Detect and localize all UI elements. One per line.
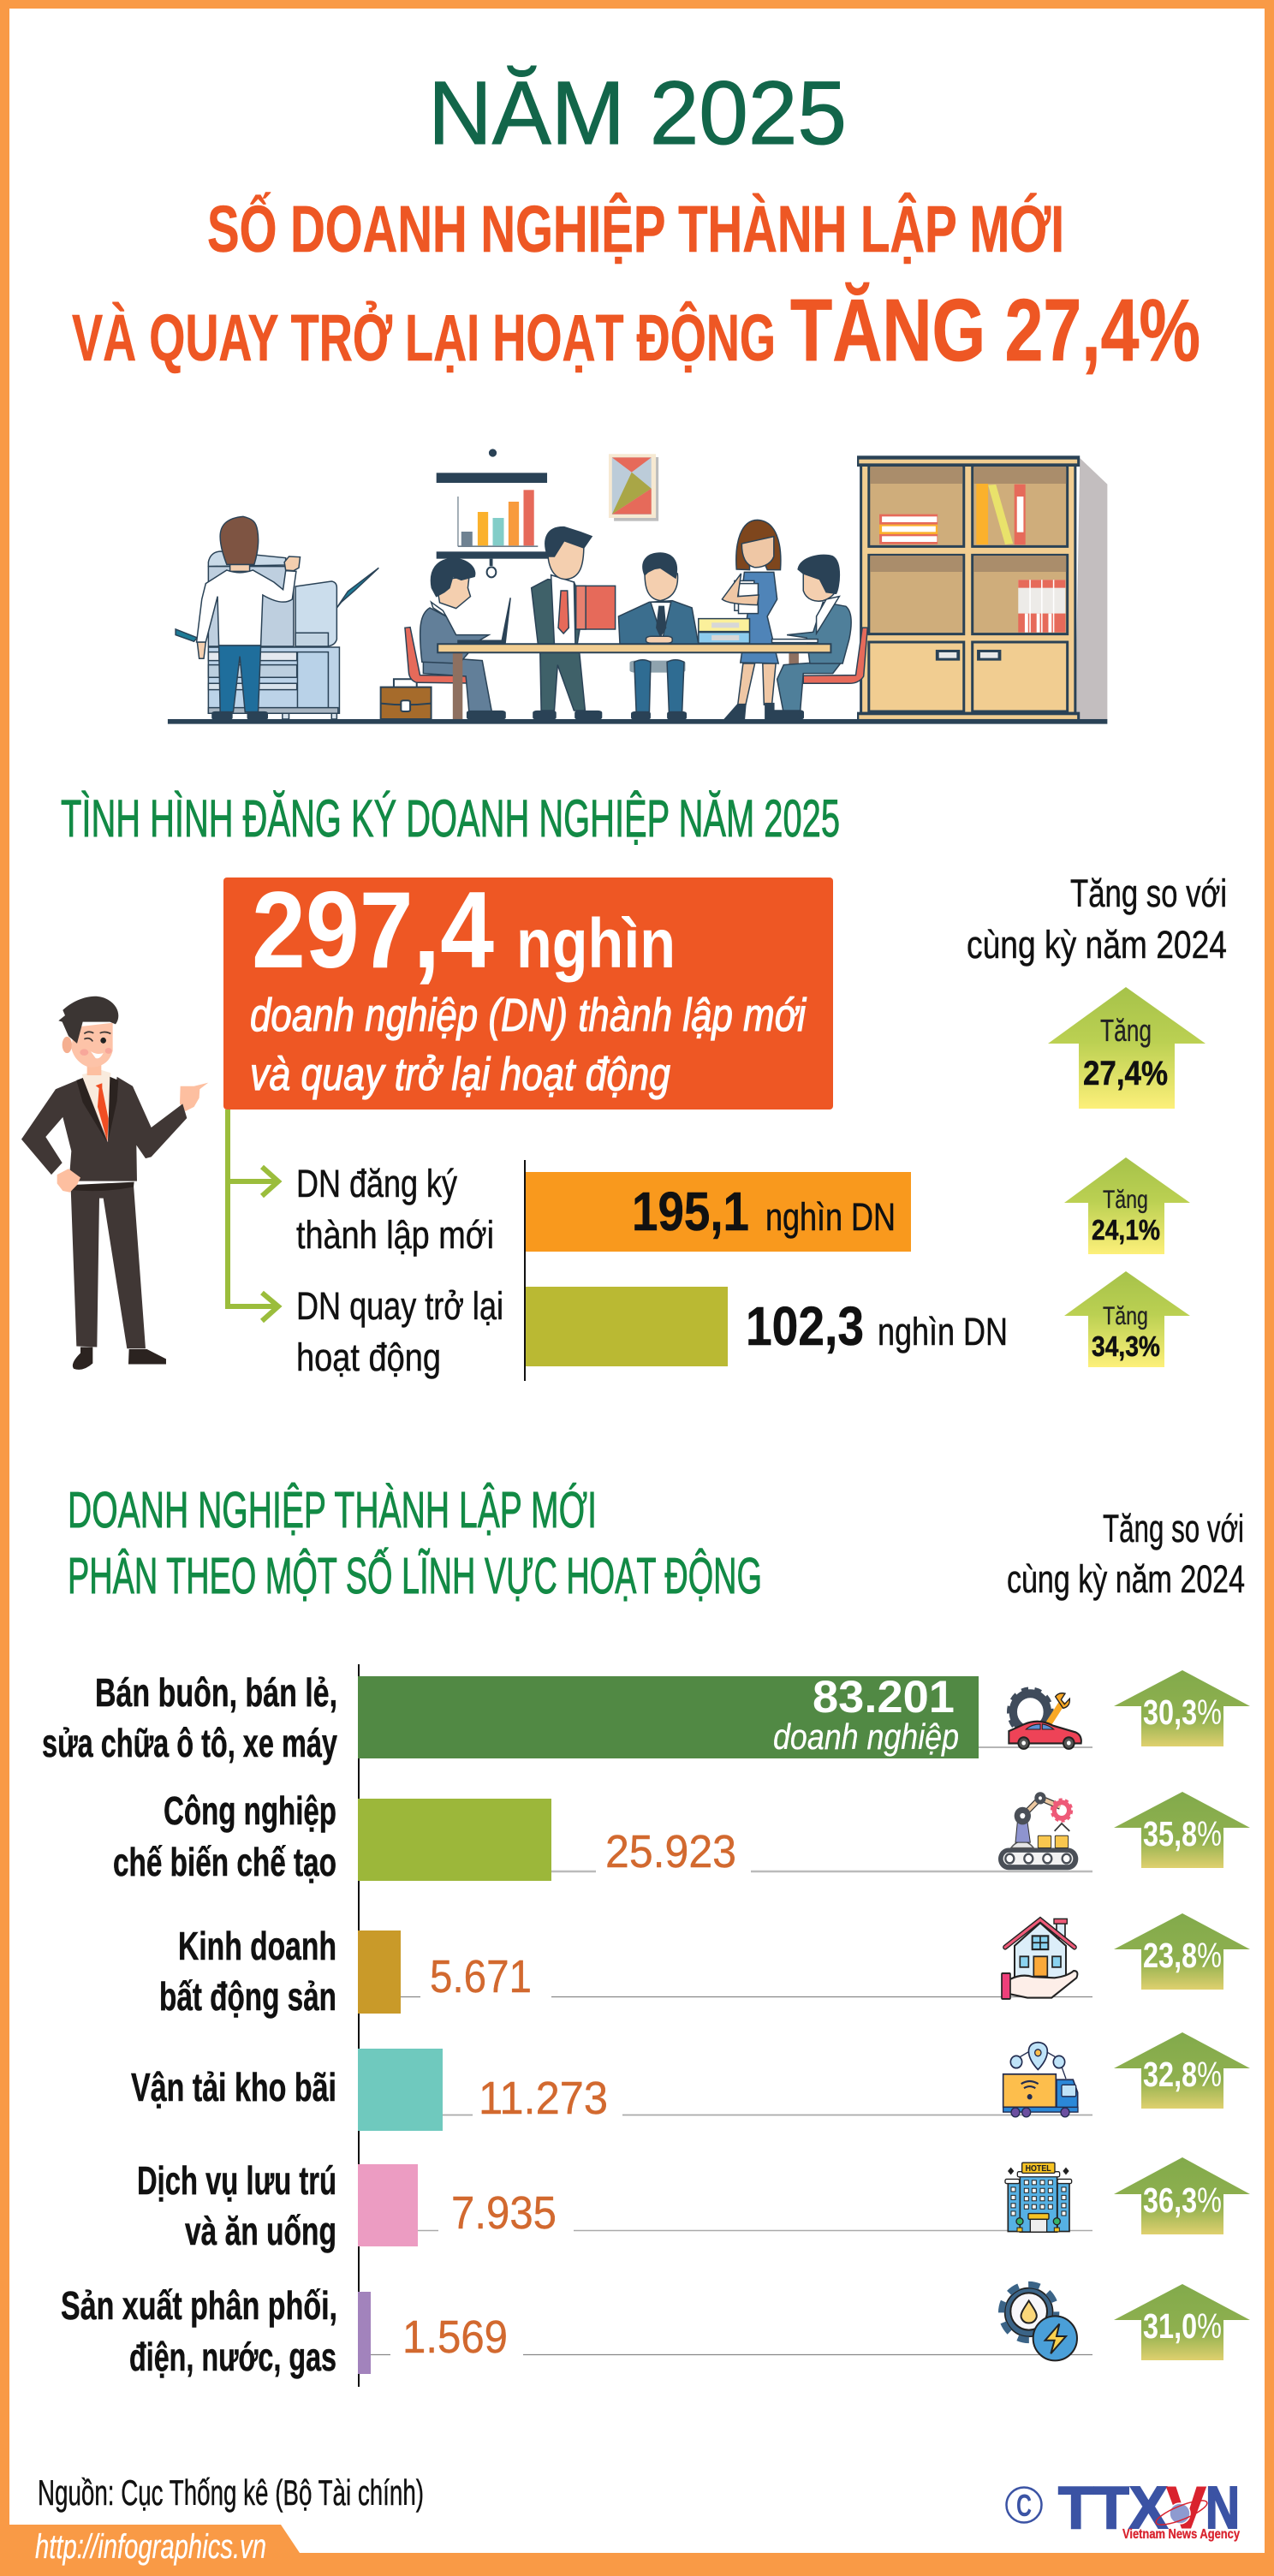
bar (358, 1676, 979, 1758)
guide line (443, 2115, 1092, 2116)
row: manufacturing (113, 1788, 1092, 1884)
website url: http://infographics.vn (35, 2528, 266, 2566)
icon: seated man with laptop (405, 558, 510, 719)
icon: wall chart (437, 449, 561, 577)
arrow: 30,3%: 30,3% (1143, 1693, 1222, 1732)
guide line (979, 1746, 1092, 1748)
arrow: 36,3%: 36,3% (1143, 2180, 1222, 2220)
bar (525, 1172, 911, 1252)
icon: house in hand (1002, 1919, 1077, 1999)
guide line (551, 1871, 1092, 1872)
value: 11.273 (479, 2073, 608, 2124)
icon: table (453, 652, 799, 720)
guide line (371, 2354, 1092, 2356)
row label second line: hoạt động (296, 1336, 441, 1379)
arrow: 34,3% (1064, 1271, 1190, 1367)
value: 7.935 (451, 2187, 557, 2239)
row label: DN quay trở lại (296, 1284, 503, 1328)
label: Vận tải kho bãi (131, 2065, 336, 2109)
title (72, 63, 1200, 379)
icon: briefcase (381, 679, 432, 719)
row label second line: thành lập mới (296, 1213, 494, 1257)
connector arrows (228, 1110, 278, 1321)
arrow: total growth 27,4%: 27,4% (1083, 1055, 1168, 1092)
title: year: NĂM 2025 (428, 63, 847, 164)
row: newly registered (296, 1162, 911, 1257)
bar (358, 2049, 443, 2131)
label: year-on-year note (967, 872, 1227, 967)
panel: total new businesses (223, 869, 833, 1110)
value: 102,3 (746, 1295, 864, 1357)
label line two: sửa chữa ô tô, xe máy (42, 1721, 337, 1765)
label: Kinh doanh (178, 1924, 336, 1968)
description line one: doanh nghiệp (DN) thành lập mới (250, 990, 807, 1041)
unit: nghìn (516, 905, 676, 983)
globe (1153, 2496, 1210, 2529)
icon: hotel (1005, 2163, 1072, 2232)
arrow: 31,0% (1114, 2284, 1250, 2360)
label line two: chế biến chế tạo (113, 1840, 336, 1884)
panel background (223, 878, 833, 1110)
guide line (418, 2229, 1092, 2231)
icon: bookcase (857, 455, 1107, 720)
icon: delivery truck with location (1003, 2043, 1078, 2117)
icon: seated man on right (767, 555, 867, 719)
label: year-on-year note: Tăng so với (1070, 872, 1227, 915)
icon: car repair (1009, 1689, 1081, 1749)
unit: doanh nghiệp (773, 1716, 959, 1757)
label: year-on-year note: cùng kỳ năm 2024 (967, 923, 1227, 967)
value: 1.569 (402, 2311, 508, 2363)
bar (358, 1931, 401, 2014)
agency letters: TTX (1058, 2474, 1168, 2541)
source note: Nguồn: Cục Thống kê (Bộ Tài chính) (38, 2472, 424, 2513)
illustration: office meeting scene (168, 449, 1107, 724)
bar (358, 1799, 551, 1881)
row: returning to operation (296, 1284, 1008, 1379)
arrow: 23,8% (1114, 1913, 1250, 1990)
label line two: và ăn uống (185, 2209, 336, 2253)
copyright symbol (1007, 2488, 1041, 2523)
icon: floor (168, 719, 1107, 724)
bar (358, 2164, 418, 2246)
label line two: bất động sản (159, 1974, 336, 2019)
agency name: Vietnam News Agency (1122, 2527, 1240, 2542)
heading: new businesses by sector: PHÂN THEO MỘT SỐ LĨNH VỰC HOẠT ĐỘNG (68, 1548, 762, 1604)
axis: sector chart (358, 1664, 360, 2387)
icon: woman with papers (722, 520, 781, 719)
icon: hotel: HOTEL (1026, 2164, 1051, 2174)
value: 5.671 (430, 1951, 532, 2002)
arrow: 34,3%: 34,3% (1092, 1330, 1160, 1362)
axis: top chart (524, 1160, 526, 1381)
arrow: 32,8% (1114, 2032, 1250, 2109)
row: transport and warehousing (131, 2049, 1092, 2131)
label: year-on-year note sector (1007, 1507, 1245, 1601)
arrow: 30,3% (1114, 1670, 1250, 1746)
red V: V (1166, 2474, 1206, 2541)
heading: new businesses by sector: DOANH NGHIỆP THÀNH LẬP MỚI (68, 1482, 597, 1538)
arrow: 35,8% (1114, 1792, 1250, 1868)
icon: table top (438, 644, 830, 652)
description line two: và quay trở lại hoạt động (250, 1049, 670, 1100)
value: 83.201 (813, 1672, 955, 1722)
arrow: total growth 27,4% (1048, 987, 1206, 1109)
arrow: 24,1% (1064, 1157, 1190, 1254)
value: 25.923 (605, 1826, 736, 1877)
value: 195,1 (632, 1181, 749, 1242)
label: Sản xuất phân phối, (61, 2283, 337, 2328)
unit: nghìn DN (765, 1195, 896, 1239)
arrow: 24,1%: 24,1% (1092, 1214, 1160, 1246)
arrow: 24,1%: Tăng (1103, 1186, 1148, 1214)
heading: new businesses by sector (68, 1482, 762, 1604)
row: real estate (159, 1924, 1092, 2019)
icon: colour binders (699, 619, 750, 643)
arrow: 31,0%: 31,0% (1143, 2306, 1222, 2346)
arrow: 32,8%: 32,8% (1143, 2055, 1222, 2094)
bar (525, 1287, 728, 1366)
logo: TTXVN (1007, 2474, 1240, 2542)
heading: registration situation: TÌNH HÌNH ĐĂNG KÝ DOANH NGHIỆP NĂM 2025 (61, 789, 840, 848)
icon: printer (176, 551, 378, 719)
icon: man at printer (197, 516, 301, 719)
arrow: 23,8%: 23,8% (1143, 1936, 1222, 1975)
row label: DN đăng ký (296, 1162, 457, 1205)
arrow: 36,3% (1114, 2157, 1250, 2234)
icon: robot arm conveyor (998, 1792, 1078, 1870)
arrow: total growth 27,4%: Tăng (1100, 1013, 1152, 1048)
guide line (401, 1996, 1092, 1998)
icon: standing man with folder (532, 527, 616, 719)
letter N: N (1206, 2474, 1240, 2541)
label line two: điện, nước, gas (129, 2335, 336, 2379)
copyright symbol: C (1016, 2488, 1032, 2523)
label: Dịch vụ lưu trú (137, 2158, 336, 2203)
label: Bán buôn, bán lẻ, (95, 1670, 337, 1715)
icon: wall picture (609, 454, 658, 521)
unit: nghìn DN (878, 1310, 1008, 1353)
arrow: 35,8%: 35,8% (1143, 1814, 1222, 1853)
row: power, water, gas (61, 2283, 1092, 2379)
row: wholesale and retail (42, 1670, 1092, 1765)
arrow: 34,3%: Tăng (1103, 1302, 1148, 1330)
icon: businessman pointing (21, 996, 208, 1370)
icon: energy gear (1002, 2285, 1077, 2360)
bar (358, 2292, 371, 2374)
row: accommodation and food (137, 2158, 1092, 2253)
title: line three: VÀ QUAY TRỞ LẠI HOẠT ĐỘNG (72, 300, 776, 375)
label: Công nghiệp (164, 1788, 336, 1833)
big number: 297,4 (252, 869, 494, 991)
icon: seated man in centre (618, 553, 699, 719)
